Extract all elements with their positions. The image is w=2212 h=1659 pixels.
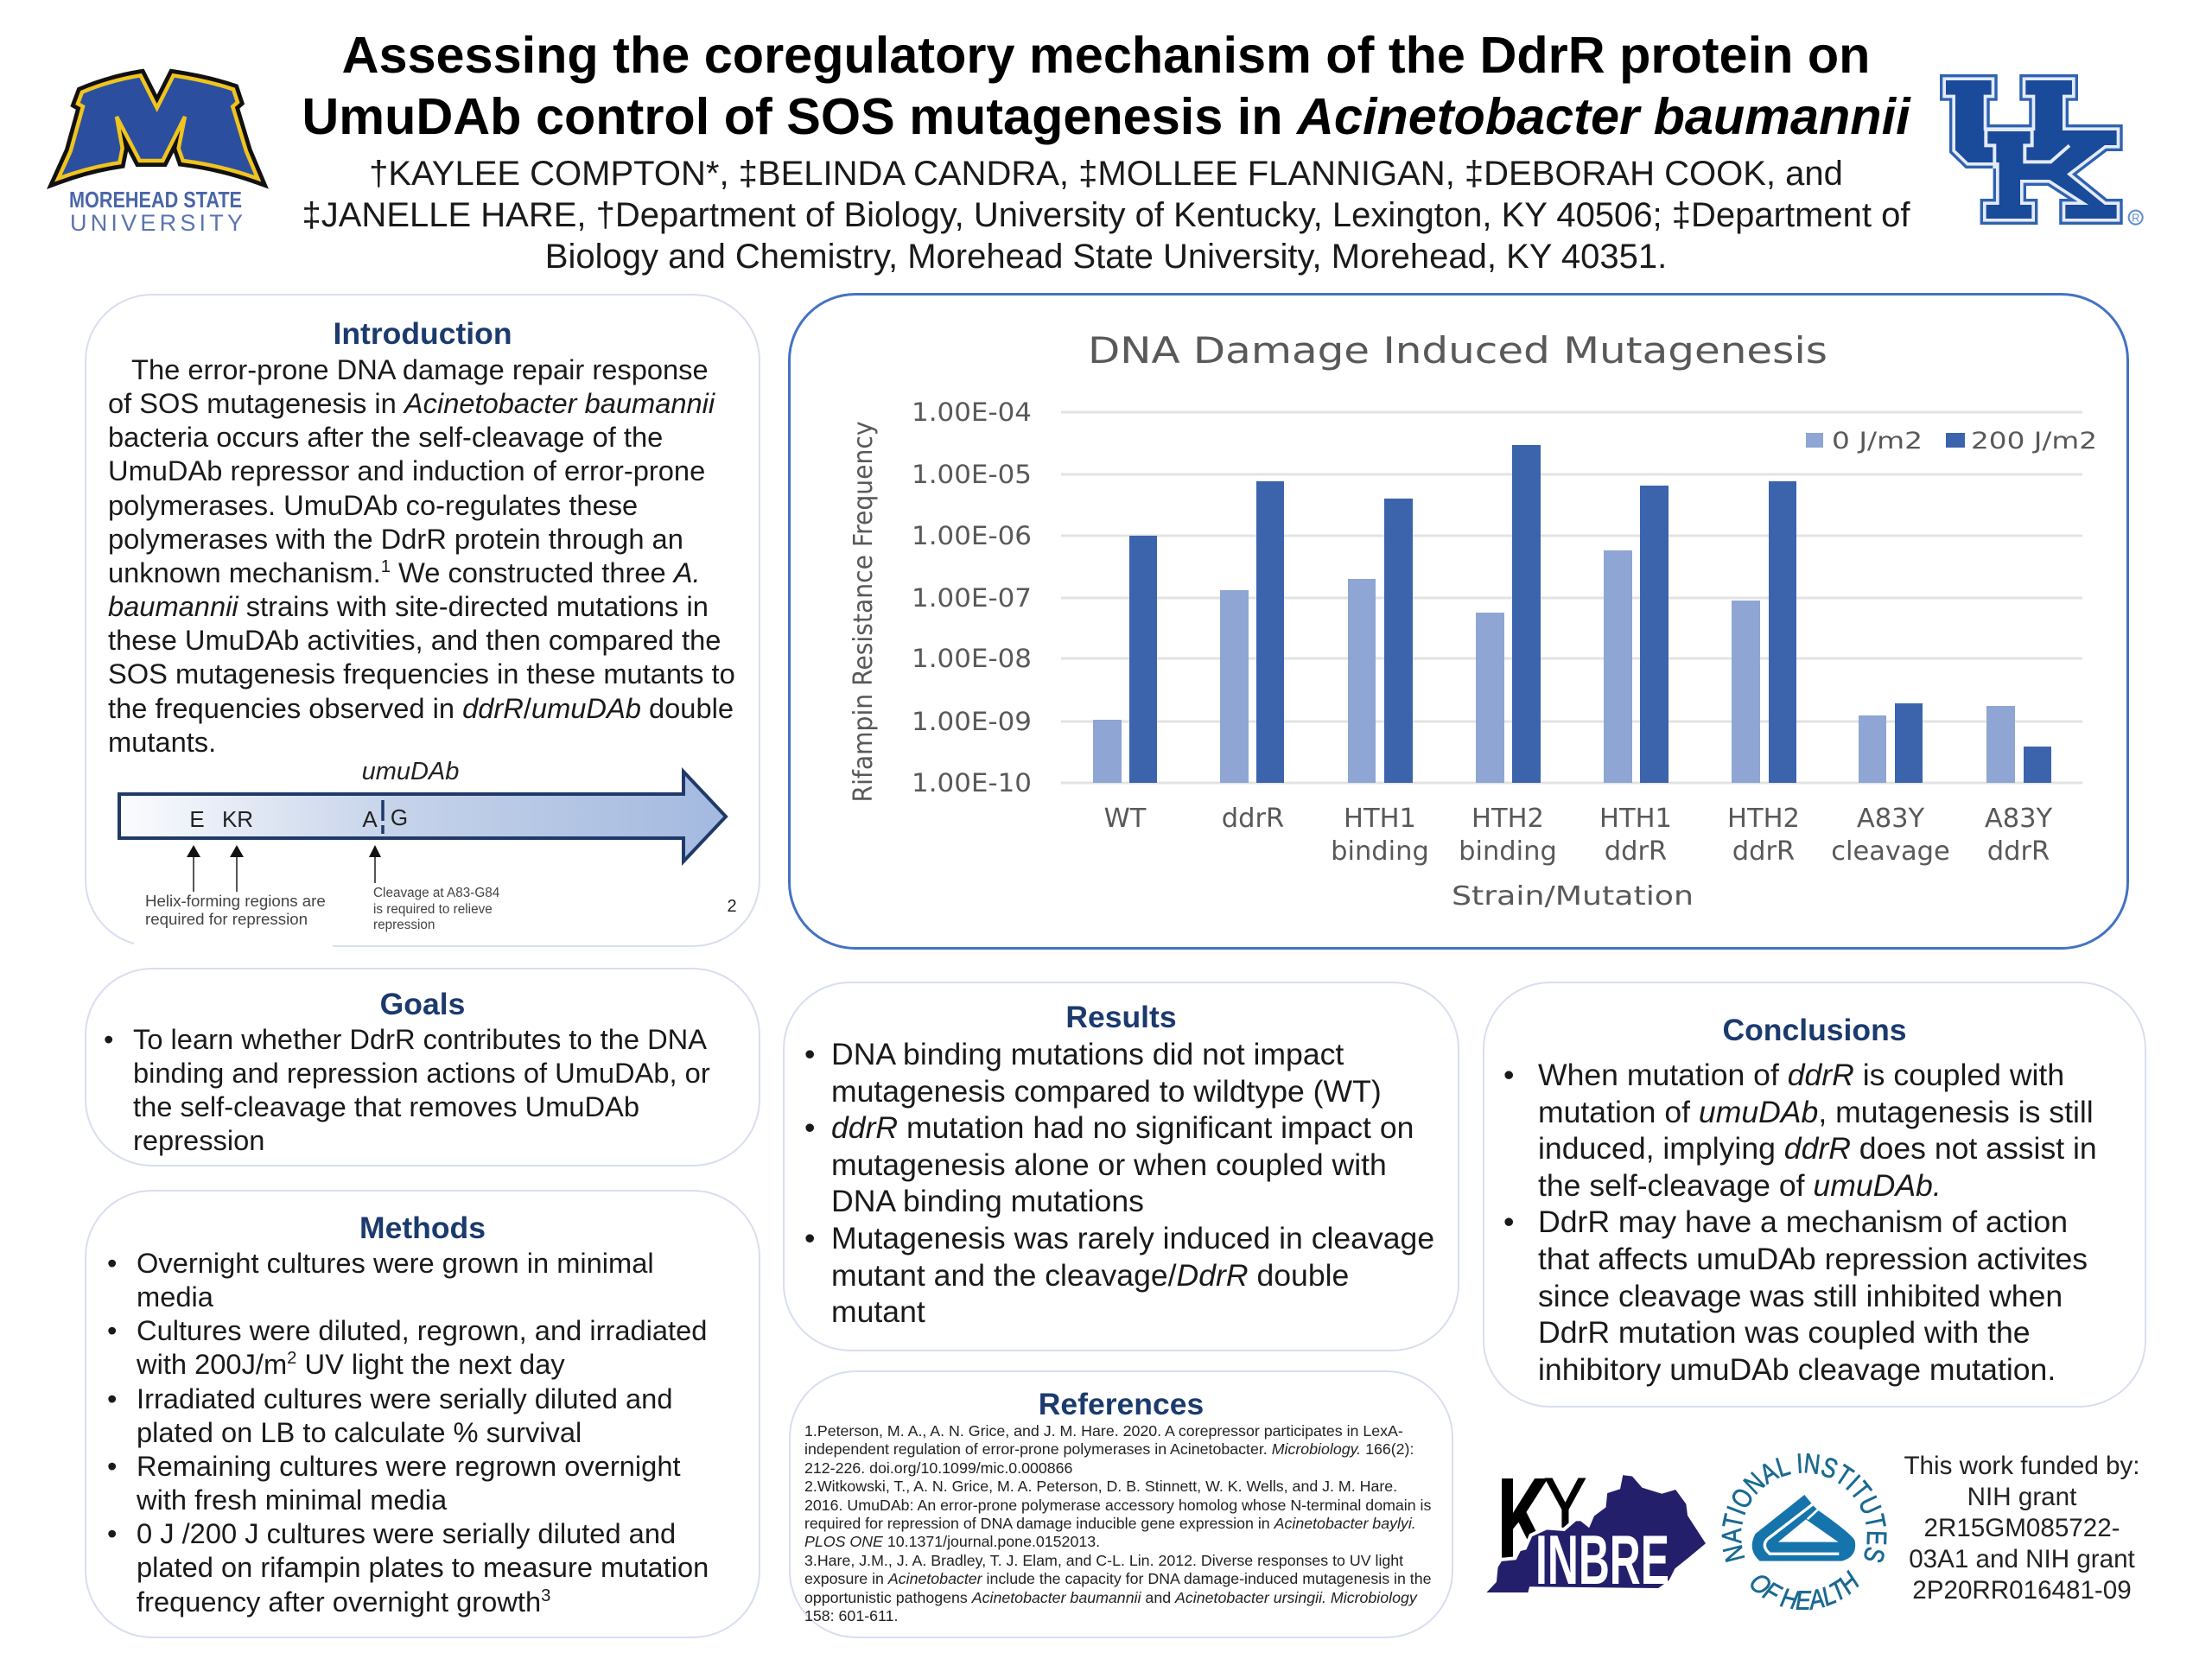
annotation: cleavage: repression [373, 918, 435, 932]
panel: introduction [85, 294, 760, 947]
list: conclusions: DdrR mutation was coupled with the [1538, 1315, 2031, 1350]
list: methods: plated on rifampin plates to measure mutation [137, 1551, 709, 1583]
pointer arrows [187, 845, 381, 892]
text: introduction body: The error-prone DNA damage repair response [131, 353, 709, 385]
text: introduction body: bacteria occurs after the self-cleavage of the [108, 421, 663, 453]
list: goals: binding and repression actions of UmuDAb, or [133, 1057, 710, 1089]
residue labels [189, 804, 408, 832]
title [302, 26, 1911, 145]
logo: National Institutes of Health: NATIONAL INSTITUTES [1721, 1453, 1887, 1562]
list: goals: To learn whether DdrR contributes to the DNA [133, 1023, 707, 1055]
list: goals: the self-cleavage that removes UmuDAb [133, 1090, 639, 1122]
x axis labels: HTH1 [1344, 804, 1416, 834]
y axis tick labels: 1.00E-09 [912, 707, 1032, 736]
text: introduction body: UmuDAb repressor and induction of error-prone [108, 454, 705, 486]
text: introduction body: baumannii strains with site-directed mutations in [108, 590, 709, 622]
panel: conclusions [1483, 982, 2146, 1408]
gene arrow body [119, 772, 726, 861]
panel: methods [85, 1190, 760, 1638]
logo: Morehead State University [47, 69, 269, 236]
text: reference list: PLOS ONE 10.1371/journal.pone.0152013. [804, 1533, 1100, 1550]
list: methods: 0 J /200 J cultures were serially diluted and [137, 1517, 676, 1549]
text: introduction body: SOS mutagenesis frequencies in these mutants to [108, 658, 735, 690]
x axis labels: ddrR [1605, 836, 1667, 867]
list: methods: Cultures were diluted, regrown, and irradiated [137, 1314, 707, 1346]
y axis tick labels: 1.00E-10 [912, 768, 1032, 798]
list: conclusions: DdrR may have a mechanism of action [1538, 1205, 2068, 1239]
annotation: cleavage: Cleavage at A83-G84 [373, 886, 500, 900]
list: conclusions: since cleavage was still inhibited when [1538, 1279, 2063, 1313]
residue labels: G [391, 804, 408, 830]
list: methods [108, 1247, 709, 1618]
list: methods: with 200J/m2 UV light the next day [137, 1348, 565, 1380]
gridlines [1061, 412, 2082, 783]
y axis tick labels: 1.00E-06 [912, 521, 1032, 550]
logo: National Institutes of Health: OF HEALTH [1751, 1569, 1859, 1611]
panel: results [783, 982, 1459, 1351]
text: reference list: independent regulation of error-prone polymerases in Acinetobacter. Microbiology. 166(2): [804, 1440, 1414, 1458]
heading: introduction: Introduction [333, 316, 512, 351]
text: reference list: opportunistic pathogens Acinetobacter baumannii and Acinetobacter ursingii. Microbiology [804, 1589, 1417, 1606]
list: methods: Remaining cultures were regrown overnight [137, 1450, 681, 1482]
text: funding acknowledgement: This work funded by: [1904, 1452, 2140, 1480]
list: conclusions: inhibitory umuDAb cleavage mutation. [1538, 1352, 2056, 1387]
diagram: umuDAb gene arrow [118, 758, 737, 947]
residue labels: KR [222, 806, 253, 832]
residue labels: A [362, 806, 378, 832]
x axis labels: A83Y [1985, 804, 2053, 834]
text: reference list: required for repression of DNA damage inducible gene expression in Acinetobacter baylyi. [804, 1515, 1416, 1532]
title: Assessing the coregulatory mechanism of the DdrR protein on [342, 26, 1870, 84]
text: funding acknowledgement: NIH grant [1967, 1483, 2076, 1511]
annotation: cleavage: is required to relieve [373, 902, 493, 917]
y axis tick labels: 1.00E-05 [912, 460, 1032, 489]
annotation: helix-forming regions: required for repression [145, 910, 308, 928]
text: funding acknowledgement: 2P20RR016481-09 [1912, 1576, 2132, 1605]
y axis tick labels: 1.00E-08 [912, 644, 1032, 673]
x axis labels: ddrR [1732, 836, 1795, 867]
text: reference list: 2016. UmuDAb: An error-prone polymerase accessory homolog whose N-terminal domain is [804, 1497, 1431, 1514]
list: results: mutagenesis alone or when coupled with [831, 1147, 1387, 1182]
legend: 200 J/m2 [1971, 428, 2097, 454]
y axis tick labels [912, 397, 1032, 798]
authors and affiliations: Biology and Chemistry, Morehead State University, Morehead, KY 40351. [545, 238, 1667, 276]
bar chart: DNA damage induced mutagenesis [849, 329, 2097, 912]
list: goals: repression [133, 1124, 264, 1156]
x axis labels: binding [1459, 836, 1557, 867]
residue labels: E [189, 806, 205, 832]
text: reference list [804, 1422, 1432, 1624]
logo: National Institutes of Health [1721, 1453, 1887, 1611]
list: results: ddrR mutation had no significant impact on [831, 1110, 1414, 1145]
list: methods: Irradiated cultures were serially diluted and [137, 1382, 672, 1414]
legend: 0 J/m2 [1832, 428, 1923, 454]
list: results: DNA binding mutations did not impact [831, 1037, 1344, 1071]
list: conclusions: that affects umuDAb repression activites [1538, 1242, 2088, 1276]
list: methods: plated on LB to calculate % survival [137, 1416, 582, 1448]
heading: results: Results [1065, 1000, 1177, 1034]
text: funding acknowledgement [1904, 1452, 2140, 1605]
list: conclusions: induced, implying ddrR does not assist in [1538, 1131, 2097, 1166]
list: conclusions: mutation of umuDAb, mutagenesis is still [1538, 1095, 2094, 1129]
list: goals [105, 1023, 710, 1156]
list: results [805, 1037, 1434, 1329]
list: conclusions [1504, 1058, 2097, 1387]
x axis labels: cleavage [1831, 836, 1950, 867]
text: reference list: exposure in Acinetobacter include the capacity for DNA damage-induced mutagenesis in the [804, 1570, 1432, 1587]
gene label: umuDAb [362, 758, 459, 785]
list: results: DNA binding mutations [831, 1184, 1144, 1218]
text: introduction body: these UmuDAb activities, and then compared the [108, 624, 721, 656]
list: results: Mutagenesis was rarely induced in cleavage [831, 1221, 1434, 1255]
authors and affiliations [302, 155, 1910, 276]
x axis labels: ddrR [1987, 836, 2050, 867]
list: methods: frequency after overnight growth3 [137, 1586, 550, 1618]
chart title: DNA Damage Induced Mutagenesis [1088, 329, 1827, 372]
list: results: mutant and the cleavage/DdrR double [831, 1258, 1349, 1293]
text: reference list: 3.Hare, J.M., J. A. Bradley, T. J. Elam, and C-L. Lin. 2012. Diverse responses to UV light [804, 1552, 1403, 1569]
text: introduction body [108, 353, 735, 758]
x axis labels [1104, 804, 2053, 867]
authors and affiliations: †KAYLEE COMPTON*, ‡BELINDA CANDRA, ‡MOLLEE FLANNIGAN, ‡DEBORAH COOK, and [369, 155, 1843, 193]
list: methods: with fresh minimal media [137, 1484, 447, 1516]
panel: references [789, 1370, 1453, 1638]
heading: methods: Methods [359, 1211, 486, 1245]
logo: Morehead State University: MOREHEAD STATE [69, 187, 242, 213]
list: conclusions: the self-cleavage of umuDAb. [1538, 1168, 1942, 1203]
text: introduction body: polymerases with the DdrR protein through an [108, 523, 683, 555]
text: introduction body: unknown mechanism.1 We constructed three A. [108, 556, 701, 588]
text: reference list: 2.Witkowski, T., A. N. Grice, M. A. Peterson, D. B. Stinnett, W. K. Wells, and J. M. Hare. [804, 1478, 1397, 1495]
x axis labels: A83Y [1857, 804, 1925, 834]
y axis tick labels: 1.00E-04 [912, 397, 1032, 427]
panel: chart [788, 293, 2129, 950]
title: UmuDAb control of SOS mutagenesis in Acinetobacter baumannii [302, 87, 1910, 145]
x axis labels: binding [1331, 836, 1429, 867]
panel: goals [85, 968, 760, 1166]
text: introduction body: the frequencies observed in ddrR/umuDAb double [108, 692, 734, 724]
x axis labels: ddrR [1222, 804, 1284, 834]
list: results: mutant [831, 1294, 925, 1329]
cleavage mark [381, 800, 385, 834]
legend [1806, 428, 2097, 454]
logo: KY INBRE [1486, 1460, 1706, 1599]
list: methods: media [137, 1281, 213, 1313]
authors and affiliations: ‡JANELLE HARE, †Department of Biology, University of Kentucky, Lexington, KY 40506; ‡Department of [302, 196, 1910, 234]
text: reference list: 1.Peterson, M. A., A. N. Grice, and J. M. Hare. 2020. A corepressor participates in LexA- [804, 1422, 1403, 1440]
citation number: 2 [727, 897, 737, 916]
text: introduction body: mutants. [108, 726, 216, 758]
y axis tick labels: 1.00E-07 [912, 583, 1032, 613]
x axis labels: WT [1104, 804, 1147, 834]
heading: conclusions: Conclusions [1722, 1013, 1907, 1047]
text: introduction body: of SOS mutagenesis in Acinetobacter baumannii [108, 387, 715, 419]
text: introduction body: polymerases. UmuDAb co-regulates these [108, 489, 638, 521]
logo: KY INBRE: Y [1544, 1462, 1586, 1548]
list: methods: Overnight cultures were grown in minimal [137, 1247, 654, 1279]
text: reference list: 158: 601-611. [804, 1607, 898, 1624]
list: conclusions: When mutation of ddrR is coupled with [1538, 1058, 2064, 1092]
x axis title: Strain/Mutation [1452, 881, 1694, 912]
bars: 0 J/m2 [1093, 550, 2015, 783]
logo: University of Kentucky [1940, 74, 2144, 226]
logo: Morehead State University: UNIVERSITY [70, 210, 243, 236]
x axis labels: HTH1 [1599, 804, 1672, 834]
text: funding acknowledgement: 03A1 and NIH grant [1909, 1545, 2135, 1573]
x axis labels: HTH2 [1727, 804, 1800, 834]
annotation: helix-forming regions: Helix-forming regions are [145, 892, 326, 910]
x axis labels: HTH2 [1471, 804, 1544, 834]
list: results: mutagenesis compared to wildtype (WT) [831, 1074, 1382, 1109]
text: funding acknowledgement: 2R15GM085722- [1923, 1514, 2120, 1542]
text: reference list: 212-226. doi.org/10.1099/mic.0.000866 [804, 1459, 1072, 1477]
heading: goals: Goals [380, 987, 465, 1021]
logo: University of Kentucky: R [2132, 213, 2139, 225]
heading: references: References [1039, 1387, 1204, 1421]
y axis title: Rifampin Resistance Frequency [849, 422, 879, 802]
bars: 200 J/m2 [1129, 445, 2051, 783]
